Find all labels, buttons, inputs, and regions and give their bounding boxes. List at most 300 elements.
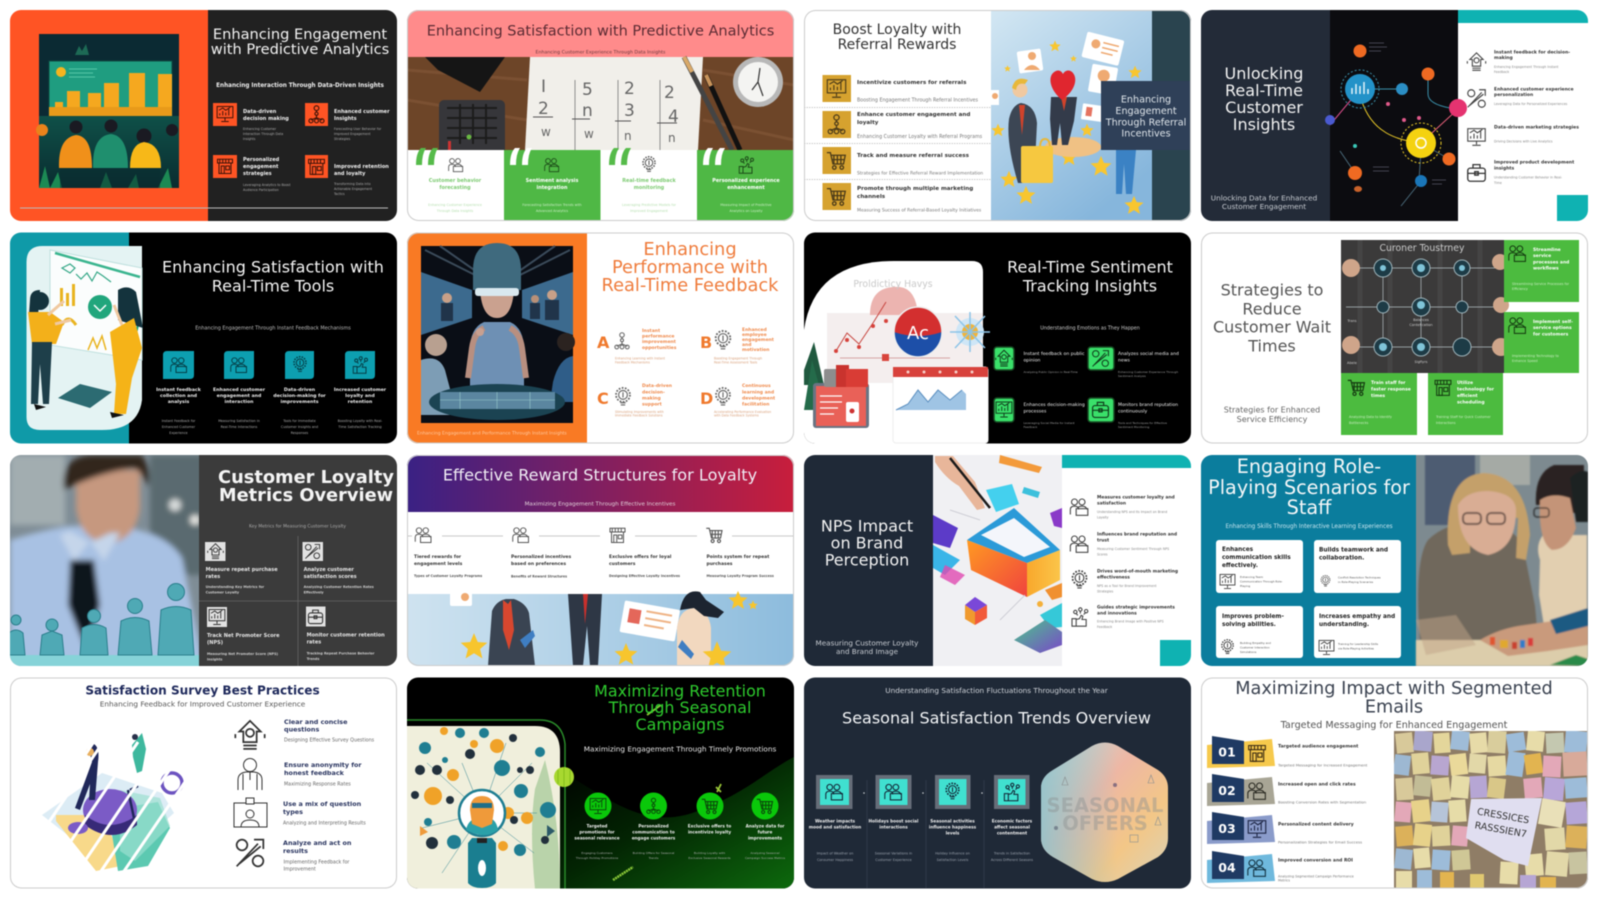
item: social media analysis: Enhancing Customer Experience Through	[1118, 370, 1178, 374]
slide: NPS Impact on Brand Perception	[804, 455, 1191, 666]
item: personalized engagement strategies: engagement	[243, 164, 279, 170]
item: track referral success: Track and measure referral success	[857, 153, 970, 159]
photo: customer journey network: Curoner Toustrney	[1379, 243, 1465, 254]
slide: Enhancing Performance with Real-Time Feedback	[407, 232, 794, 444]
slide: Strategies to Reduce Customer Wait Times	[1201, 232, 1588, 444]
card: problem solving: Simulations	[1240, 650, 1257, 654]
callout: Enhancing Engagement Through Referral Incentives: Incentives	[1121, 128, 1171, 140]
item: decision-making: Enhances decision-making	[1024, 402, 1085, 408]
item: instant feedback: making	[1494, 55, 1513, 61]
item: public opinion	[994, 347, 1085, 374]
item: ensure anonymity: Maximizing Response Rates	[284, 782, 351, 788]
item: improved retention and loyalty: Transforming Data into	[333, 182, 371, 186]
panel: self-service options: Implement self-	[1533, 319, 1573, 325]
item: clear and concise questions: Clear and concise	[284, 718, 348, 726]
metric: customer retention: Trends	[307, 657, 319, 661]
item: enhanced customer insights: Enhanced customer	[334, 109, 390, 115]
item: exclusive offers: Exclusive offers to	[688, 824, 731, 828]
item: word of mouth	[1072, 568, 1178, 594]
panel: real-time feedback monitoring: Improved Engagement	[630, 209, 669, 213]
metric: repeat purchase rates: Measure repeat purchase	[206, 567, 278, 573]
item: improved retention and loyalty	[305, 155, 389, 196]
card: communication skills: Playing	[1240, 584, 1250, 588]
item B: B	[700, 333, 712, 352]
item B	[700, 327, 775, 364]
panel: utilize technology: Utilize	[1457, 380, 1473, 386]
item B: Real-Time Assessment Tools	[714, 360, 758, 364]
item: measures loyalty: Measures customer loyalty and	[1097, 494, 1175, 500]
subtitle: Enhancing Feedback for Improved Customer Experience	[100, 700, 306, 708]
item: word of mouth: NPS as a Tool for Brand Improvement	[1097, 584, 1157, 588]
slide: Unlocking Real-Time Customer Insights	[1201, 10, 1588, 221]
item D: Continuous	[742, 383, 771, 389]
metric: customer retention	[306, 606, 385, 661]
item: improved retention and loyalty: Tactics	[333, 192, 345, 196]
title: Campaigns	[636, 715, 724, 734]
card: teamwork: Builds teamwork and	[1319, 548, 1388, 554]
title: Performance with	[612, 257, 768, 278]
photo: desk with handwritten numbers: 2	[664, 83, 675, 103]
item: holidays boost: interactions	[879, 824, 908, 830]
item: enhanced customer engagement	[213, 351, 266, 429]
item: weather impacts: mood and satisfaction	[809, 824, 861, 830]
item A: performance	[642, 334, 674, 340]
item A: Feedback Mechanisms	[615, 360, 650, 364]
illustration: predictive dashboard with AC badge: Proldicticy Havys	[853, 279, 933, 290]
item D: D	[700, 389, 713, 408]
title: Real-Time Feedback	[602, 275, 779, 296]
item: instant feedback collection: analysis	[168, 399, 189, 405]
panel: customer behavior forecasting	[415, 147, 505, 213]
photo: customer journey network: Balances	[1413, 318, 1429, 322]
title: Enhancing	[643, 239, 737, 260]
item C: decision-	[642, 390, 665, 396]
item: holidays boost: Seasonal Variations in	[875, 852, 912, 856]
photo: desk with handwritten numbers: 5	[582, 80, 593, 100]
item: personalized engagement strategies: strategies	[243, 171, 272, 177]
item: economic factors: affect seasonal	[994, 824, 1030, 830]
item B: and	[742, 342, 751, 348]
item: improved retention and loyalty: Actionable Engagement	[334, 187, 373, 191]
item: enhanced personalization: Leveraging Data for Personalized Experiences	[1494, 102, 1568, 106]
item: improved retention and loyalty: and loyalty	[334, 171, 366, 177]
item: holidays boost: Holidays boost social	[869, 818, 919, 824]
item: data-driven decision making: Responses	[291, 431, 309, 435]
slide: Seasonal Satisfaction Trends Overview	[804, 678, 1191, 888]
photo: desk with handwritten numbers: I	[541, 77, 546, 97]
slide: Enhancing Engagement with Predictive Analytics	[10, 10, 397, 221]
panel: customer behavior forecasting: Through Data Insights	[436, 209, 474, 213]
item: exclusive offers	[688, 792, 731, 860]
item: increased customer loyalty: retention	[348, 399, 372, 405]
step: personalized incentives: Personalized incentives	[511, 554, 571, 560]
photo: customer journey network: Contefication	[1409, 323, 1433, 327]
item: holidays boost	[869, 775, 919, 862]
item: targeted promotions: seasonal relevance	[574, 836, 620, 840]
item: data-driven decision making: improvements	[280, 399, 319, 405]
item: instant feedback collection	[156, 351, 202, 435]
item C: support	[642, 402, 663, 408]
item: promote through channels: Promote through multiple marketing	[857, 186, 973, 192]
photo: desk with handwritten numbers: 2	[624, 79, 635, 99]
item: public opinion: Instant feedback on public	[1024, 351, 1085, 357]
item: enhance engagement: Enhancing Customer Loyalty with Referral Programs	[857, 134, 983, 140]
item: enhanced customer engagement: Measuring Satisfaction in	[218, 419, 260, 423]
title: Insights	[1233, 115, 1295, 134]
item: measures loyalty	[1070, 494, 1175, 520]
item D: development	[742, 396, 776, 402]
item B: engagement	[742, 337, 775, 343]
step: tiered rewards: engagement levels	[414, 561, 463, 567]
title: Metrics Overview	[219, 485, 393, 506]
title: Perception	[825, 550, 909, 570]
title: Strategies to	[1221, 280, 1323, 300]
item: social media analysis: news	[1118, 358, 1130, 364]
subtitle: Understanding Satisfaction Fluctuations Throughout the Year	[885, 686, 1108, 695]
card: empathy: Increases empathy and	[1319, 614, 1395, 620]
title: Times	[1247, 336, 1296, 356]
metric: satisfaction scores: Analyze customer	[304, 567, 354, 573]
panel: customer behavior forecasting: Enhancing Customer Experience	[428, 203, 482, 207]
item: enhanced personalization: personalization	[1494, 92, 1533, 98]
metric: satisfaction scores	[302, 542, 374, 594]
item A	[597, 328, 677, 364]
item C: making	[642, 396, 661, 402]
step: tiered rewards	[414, 528, 482, 578]
item: analyze data: Analyze data for	[746, 824, 785, 828]
title: Boost Loyalty with	[833, 22, 961, 38]
item: seasonal activities: Seasonal activities	[930, 818, 975, 824]
subtitle: and Brand Image	[836, 647, 899, 656]
metric: customer retention: Tracking Repeat Purchase Behavior	[307, 652, 375, 656]
step 03: Personalized content delivery	[1278, 822, 1354, 828]
title: Emails	[1365, 698, 1423, 718]
item: seasonal activities	[929, 775, 977, 862]
title: with Predictive Analytics	[211, 41, 389, 58]
item: mix of question types: types	[283, 808, 303, 816]
illustration: predictive dashboard with AC badge: Ac	[907, 323, 929, 344]
item: instant feedback collection: Instant Feedback for	[162, 419, 196, 423]
panel: train staff: Train staff for	[1371, 380, 1406, 386]
panel: sentiment analysis integration: Forecasting Satisfaction Trends with	[522, 203, 582, 207]
panel: utilize technology: Training Staff for Quick Customer	[1435, 415, 1491, 419]
item: promote through channels: Measuring Success of Referral-Based Loyalty Initiatives	[857, 208, 982, 214]
panel: self-service options: Implementing Technology to	[1512, 354, 1559, 358]
title: Seasonal Satisfaction Trends Overview	[842, 708, 1151, 728]
slide: Satisfaction Survey Best Practices	[10, 678, 397, 888]
item: data-driven decision making	[213, 103, 289, 141]
panel: personalized experience enhancement: Measuring Impact of Predictive	[720, 203, 772, 207]
photo: desk with handwritten numbers: n	[582, 101, 593, 121]
card: empathy	[1314, 606, 1401, 658]
panel: sentiment analysis integration: Sentiment analysis	[526, 178, 578, 184]
item D: with Data Feedback Systems	[714, 414, 759, 418]
item: economic factors: contentment	[997, 830, 1027, 836]
slide: Maximizing Impact with Segmented Emails	[1201, 678, 1588, 889]
subtitle: Targeted Messaging for Enhanced Engagement	[1280, 720, 1508, 731]
card: communication skills: Enhancing Team	[1240, 575, 1263, 579]
metric: net promoter score: Track Net Promoter Score	[207, 633, 280, 639]
step: points system: purchases	[706, 561, 733, 567]
item: data-driven decision making: Tools for Immediate	[282, 419, 316, 423]
card: teamwork: in Role-Playing Scenarios	[1338, 580, 1374, 584]
item: instant feedback	[1467, 50, 1570, 74]
title: Customer Wait	[1213, 318, 1331, 336]
badge: seasonal offers hexagon: OFFERS	[1062, 812, 1148, 835]
item: decision-making: Leveraging Social Media for Instant	[1024, 421, 1075, 425]
step 01	[1207, 736, 1368, 768]
card: empathy: Training for Leadership Skills	[1337, 642, 1379, 646]
item C: Immediate Feedback Solutions	[615, 414, 663, 418]
item: product development: insights	[1494, 166, 1515, 172]
card: teamwork: Conflict Resolution Techniques	[1338, 576, 1381, 580]
title: Customer Loyalty	[218, 467, 394, 488]
item: brand reputation: trust	[1097, 538, 1109, 544]
item: instant feedback collection: collection and	[160, 393, 197, 399]
slide: Maximizing Retention Through Seasonal Campaigns	[407, 678, 794, 889]
item: instant feedback: Feedback	[1494, 70, 1509, 74]
step 04: 04	[1218, 860, 1236, 875]
item: instant feedback: Instant feedback for decision-	[1494, 50, 1570, 56]
item: brand reputation: Scores	[1097, 552, 1108, 556]
item: exclusive offers: Building Loyalty with	[694, 851, 725, 855]
photo: desk with handwritten numbers: 2	[538, 99, 549, 119]
item: track referral success: Strategies for Effective Referral Reward Implementation	[857, 170, 983, 176]
item: measures loyalty: Loyalty	[1097, 516, 1109, 520]
panel: self-service options: for customers	[1533, 332, 1569, 338]
item: weather impacts: Impact of Weather on	[817, 852, 853, 856]
item: weather impacts: Consumer Happiness	[817, 858, 853, 862]
item: brand reputation: Monitors brand reputation	[1118, 402, 1178, 408]
subtitle: Unlocking Data for Enhanced	[1211, 194, 1317, 202]
item: data-driven decision making: Enhancing Customer	[243, 127, 277, 131]
item D: facilitation	[742, 402, 769, 408]
item: personalized communication: Trends	[648, 856, 659, 860]
illustration: referral rewards businessmen	[991, 10, 1152, 221]
item: instant feedback collection: Instant feedback	[156, 387, 202, 393]
card: problem solving: Improves problem-	[1222, 614, 1284, 620]
item: mix of question types: Use a mix of question	[283, 800, 362, 808]
illustration: predictive dashboard with AC badge	[804, 261, 990, 444]
item: clear and concise questions: questions	[284, 726, 319, 734]
item: seasonal activities: Holiday Influence on	[935, 852, 970, 856]
item: strategic improvements: Enhancing Brand Image with Positive NPS	[1097, 620, 1164, 624]
item: seasonal activities: influence happiness	[929, 824, 977, 830]
photo: customer journey network	[1341, 240, 1510, 373]
item: measures loyalty: satisfaction	[1097, 500, 1126, 506]
subtitle: Enhancing Engagement Through Instant Feedback Mechanisms	[195, 326, 351, 332]
item: incentivize customers	[822, 75, 978, 104]
item: personalized communication: Personalized	[638, 824, 669, 828]
item B: employee	[742, 332, 767, 338]
step 03: 03	[1218, 821, 1236, 836]
title: Real-Time Sentiment	[1007, 258, 1173, 276]
item: social media analysis: Sentiment Analysis	[1118, 374, 1146, 378]
illustration: women analysing dashboard	[26, 246, 143, 430]
card: problem solving: Customer Interaction	[1240, 646, 1270, 650]
item: product development: Time	[1493, 181, 1502, 185]
item: analyze and act on results: Implementing Feedback for	[284, 860, 349, 866]
item: word of mouth: Strategies	[1097, 590, 1114, 594]
item: brand reputation	[1088, 398, 1178, 429]
title: Enhancing Satisfaction with	[162, 258, 384, 276]
step: tiered rewards: Tiered rewards for	[414, 554, 462, 560]
step 02	[1207, 774, 1367, 806]
item: brand reputation: Tools and Techniques for Effective	[1117, 421, 1167, 425]
item: increased customer loyalty: Increased customer	[334, 387, 387, 393]
item: targeted promotions: Targeted	[587, 824, 607, 828]
card: communication skills: effectively.	[1222, 563, 1258, 569]
item: targeted promotions: promotions for	[579, 830, 616, 834]
item B: motivation	[742, 347, 769, 353]
item: analyze data: improvements	[748, 836, 782, 840]
subtitle: Maximizing Engagement Through Timely Promotions	[584, 744, 776, 754]
title: Real-Time Tools	[212, 276, 334, 296]
metric: repeat purchase rates: Understanding Key Metrics for	[206, 585, 265, 589]
item: mix of question types: Analyzing and Interpreting Results	[283, 820, 366, 826]
item: enhance engagement: Enhance customer engagement and	[857, 112, 970, 118]
item A: improvement	[642, 339, 677, 345]
item: instant feedback collection: Enhanced Customer	[162, 425, 196, 429]
metric: net promoter score	[207, 607, 280, 662]
item: targeted promotions: Through Holiday Promotions	[575, 856, 619, 860]
item: personalized communication: communication to	[632, 830, 675, 834]
card: communication skills: Enhances	[1222, 547, 1254, 553]
item: targeted promotions: Engaging Customers	[581, 851, 613, 855]
photo: desk with handwritten numbers: n	[668, 131, 676, 145]
slide: Enhancing Satisfaction with Predictive Analytics	[407, 10, 794, 221]
item: promote through channels: channels	[857, 194, 886, 200]
item: strategic improvements: and innovations	[1097, 610, 1137, 616]
item D	[700, 383, 776, 418]
step 04: Metrics	[1278, 878, 1290, 882]
photo: customer journey network: Abele	[1347, 361, 1357, 365]
title: Playing Scenarios for	[1208, 476, 1410, 499]
item: social media analysis: Analyzes social media and	[1118, 351, 1179, 357]
item: ensure anonymity: honest feedback	[284, 769, 345, 777]
item: public opinion: opinion	[1024, 358, 1041, 364]
item: data-driven decision making: decision making	[243, 116, 289, 122]
item: promote through channels	[822, 183, 982, 214]
item: increased customer loyalty: loyalty and	[345, 393, 375, 399]
metric: net promoter score: (NPS)	[207, 640, 223, 646]
item: brand reputation: Measuring Customer Sentiment Through NPS	[1097, 547, 1169, 551]
panel: train staff: Analyzing Data to Identify	[1349, 415, 1392, 419]
step: personalized incentives: Benefits of Reward Structures	[511, 574, 567, 578]
photo: desk with handwritten numbers	[407, 57, 794, 158]
panel: customer behavior forecasting: forecasting	[439, 185, 471, 191]
item: enhanced customer insights: Strategies	[334, 137, 351, 141]
title: Real-Time	[1225, 81, 1303, 100]
card: problem solving	[1216, 606, 1303, 658]
panel: personalized experience enhancement: enhancement	[727, 185, 765, 191]
panel: sentiment analysis integration: integration	[537, 185, 568, 191]
badge: seasonal offers hexagon	[1041, 742, 1168, 882]
item: enhance engagement: loyalty	[857, 120, 879, 126]
title: Reduce	[1242, 300, 1302, 318]
item: data-driven decision making: Data-driven	[284, 387, 315, 393]
item: analyze and act on results: Analyze and act on	[283, 839, 352, 847]
step 01: Targeted Messaging for Increased Engagement	[1277, 762, 1368, 768]
title: Effective Reward Structures for Loyalty	[443, 466, 758, 484]
card: problem solving: solving abilities.	[1222, 622, 1276, 628]
metric: repeat purchase rates: rates	[206, 574, 220, 580]
panel: streamline service processes: Streamlining Service Processes for	[1512, 282, 1570, 286]
item: data-driven decision making: Interaction Through Data	[243, 132, 283, 136]
item: word of mouth: effectiveness	[1097, 574, 1130, 580]
card: problem solving: Building Empathy and	[1240, 641, 1271, 645]
step: exclusive offers: Designing Effective Loyalty Incentives	[609, 574, 680, 578]
item: personalized communication	[632, 792, 676, 860]
panel: streamline service processes: processes and	[1533, 260, 1569, 266]
item: personalized engagement strategies: Leveraging Analytics to Boost	[243, 183, 291, 187]
item: data-driven decision making: Data-driven	[243, 109, 277, 115]
subtitle: Enhancing Interaction Through Data-Driven Insights	[216, 83, 384, 89]
step 04	[1207, 851, 1354, 883]
card: teamwork: collaboration.	[1319, 556, 1364, 562]
illustration: isometric survey analysis	[30, 720, 200, 880]
item: personalized engagement strategies: Personalized	[243, 157, 280, 163]
slide: Boost Loyalty with Referral Rewards	[804, 10, 1191, 221]
item: targeted promotions	[574, 792, 620, 860]
slide: Effective Reward Structures for Loyalty	[407, 455, 794, 668]
slide: Real-Time Sentiment Tracking Insights	[804, 232, 1191, 444]
item: marketing strategies	[1468, 124, 1579, 145]
panel: utilize technology: technology for	[1457, 386, 1495, 392]
item: enhanced customer insights: Forecasting User Behavior for	[334, 127, 382, 131]
item: decision-making	[994, 398, 1085, 429]
title: Enhancing Engagement	[213, 26, 387, 43]
metric: customer retention: rates	[307, 640, 321, 646]
item A: Instant	[642, 328, 661, 334]
item: brand reputation: Sentiment Monitoring	[1118, 425, 1149, 429]
step: points system: Points system for repeat	[706, 554, 770, 560]
illustration: open data box with colourful cards	[933, 455, 1062, 666]
item: increased customer loyalty	[334, 351, 387, 429]
item: increased customer loyalty: Time Satisfaction Tracking	[337, 425, 382, 429]
panel: personalized experience enhancement: Analytics on Loyalty	[729, 209, 763, 213]
item: clear and concise questions: Designing Effective Survey Questions	[284, 738, 375, 744]
item: brand reputation: continuously	[1118, 408, 1148, 414]
step: exclusive offers	[609, 528, 680, 578]
step: points system	[706, 528, 774, 578]
panel: streamline service processes	[1504, 240, 1579, 302]
item: economic factors: Trends in Satisfaction	[993, 852, 1030, 856]
subtitle: Key Metrics for Measuring Customer Loyalty	[249, 524, 346, 530]
subtitle: Enhancing Customer Experience Through Data Insights	[536, 50, 666, 56]
title: Tracking Insights	[1022, 276, 1157, 296]
panel: train staff: times	[1371, 393, 1385, 399]
photo: desk with handwritten numbers: 4	[668, 107, 679, 127]
item C: Data-driven	[642, 383, 672, 389]
item: personalized engagement strategies: Audience Participation	[243, 188, 279, 192]
panel: streamline service processes: Efficiency	[1512, 287, 1528, 291]
item A: opportunities	[642, 345, 677, 351]
item: ensure anonymity	[238, 758, 362, 790]
item: instant feedback: Enhancing Engagement Through Instant	[1494, 65, 1559, 69]
step: points system: Measuring Loyalty Program Success	[706, 574, 774, 578]
item: product development: Understanding Customer Behavior in Real-	[1494, 176, 1562, 180]
card: communication skills: communication skills	[1222, 555, 1291, 561]
title: Unlocking	[1225, 64, 1303, 83]
metric: satisfaction scores: Analyzing Customer Retention Rates	[304, 585, 374, 589]
subtitle: Strategies for Enhanced	[1224, 406, 1320, 414]
item: personalized communication: engage customers	[632, 836, 676, 840]
panel: utilize technology: scheduling	[1457, 400, 1485, 406]
card: teamwork	[1314, 540, 1401, 593]
item B: Boosting Engagement Through	[714, 356, 762, 360]
item: strategic improvements	[1072, 604, 1175, 629]
